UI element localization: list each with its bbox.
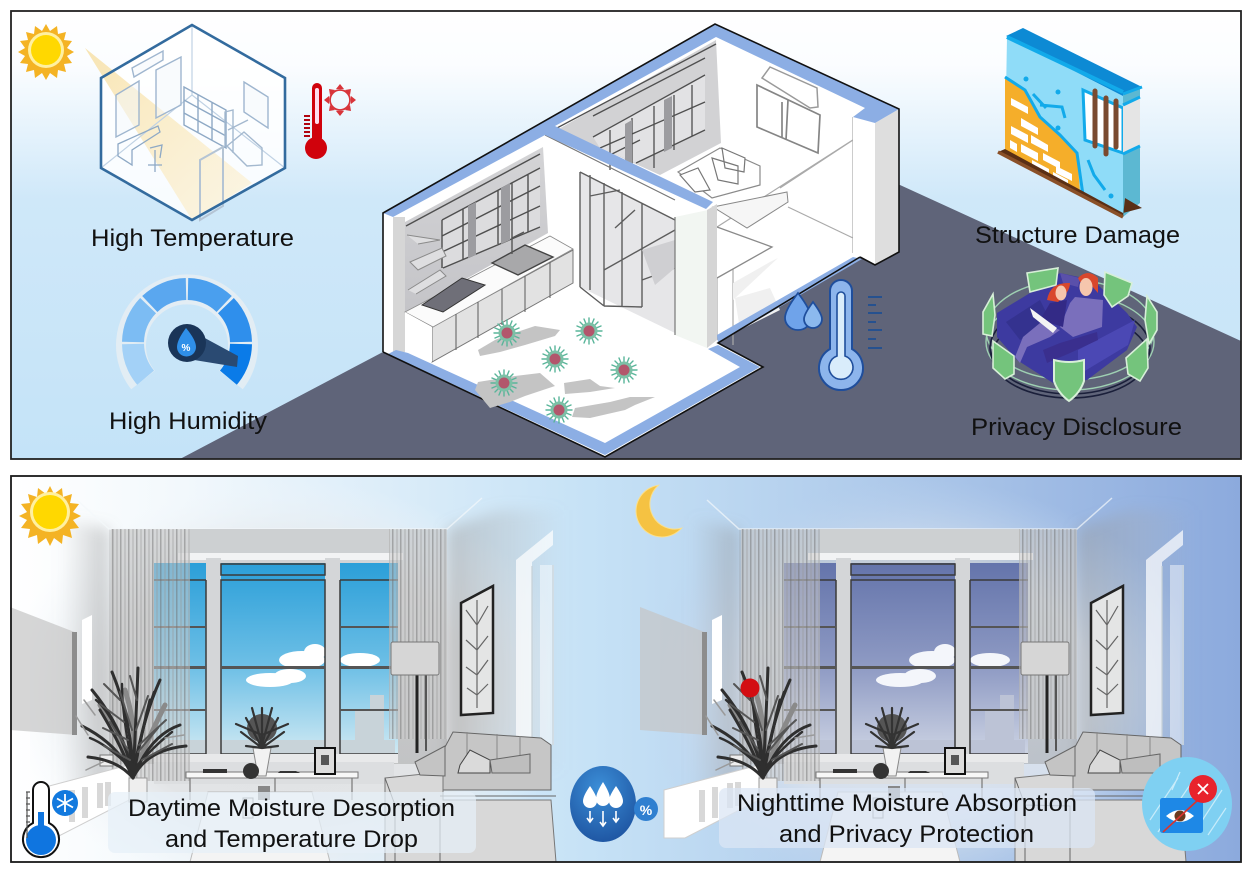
sinks bbox=[422, 278, 485, 312]
mould stains bbox=[475, 326, 655, 418]
kitchen windows bbox=[406, 154, 540, 268]
outlines bbox=[383, 24, 899, 352]
shelves bbox=[407, 235, 446, 294]
sliding door bbox=[580, 172, 675, 333]
icon: sun bbox=[19, 486, 81, 546]
shields front bbox=[1145, 296, 1157, 344]
icon: water drops bbox=[785, 293, 822, 330]
sofa bbox=[997, 273, 1137, 383]
panel: problems of indoor environment bbox=[11, 11, 1241, 459]
dark floor bbox=[180, 185, 1241, 459]
AC and window bbox=[762, 67, 818, 108]
label: nighttime: and Privacy Protection bbox=[779, 821, 1034, 848]
icon: humidity gauge: % bbox=[182, 343, 191, 354]
heading: Structure Damage: Structure Damage bbox=[975, 222, 1180, 249]
counter bbox=[432, 250, 573, 362]
long diagonal lines bbox=[717, 117, 873, 345]
illustration: isometric apartment bbox=[383, 24, 899, 457]
couple bbox=[1060, 273, 1080, 287]
right column bbox=[853, 117, 875, 265]
icon: blue thermometer bbox=[819, 280, 882, 390]
icon: humidity gauge bbox=[131, 289, 243, 380]
icon: moisture droplets bbox=[570, 766, 658, 842]
table and shadows bbox=[717, 227, 772, 278]
label: nighttime bbox=[719, 788, 1095, 848]
wall tops blue bbox=[383, 24, 899, 217]
heading: High Humidity: High Humidity bbox=[109, 408, 267, 435]
heading: Privacy Disclosure: Privacy Disclosure bbox=[971, 414, 1182, 441]
central column bbox=[675, 210, 708, 348]
label: nighttime: Nighttime Moisture Absorption bbox=[737, 790, 1077, 817]
bed bbox=[713, 192, 788, 228]
icon: moisture droplets: % bbox=[640, 802, 653, 818]
icon: privacy couple on sofa with shields bbox=[983, 268, 1157, 401]
label: daytime bbox=[108, 792, 476, 853]
icon: red thermometer with sun bbox=[304, 83, 356, 159]
label: daytime: and Temperature Drop bbox=[165, 826, 418, 853]
icon: thermometer with snowflake bbox=[23, 782, 78, 857]
back room wall and windows bbox=[557, 40, 721, 175]
icon: sun bbox=[18, 24, 74, 80]
icon: blocked eye privacy bbox=[1142, 757, 1232, 851]
scene: daytime living room bbox=[10, 480, 565, 862]
label: daytime: Daytime Moisture Desorption bbox=[128, 795, 455, 822]
icon: crescent moon bbox=[636, 485, 682, 537]
scene: nighttime living room bbox=[640, 480, 1195, 862]
back wall kitchen bbox=[405, 147, 548, 313]
icon: hexagon room with sunlight bbox=[85, 25, 285, 220]
heading: High Temperature: High Temperature bbox=[91, 225, 294, 252]
shields back bbox=[1027, 268, 1058, 292]
viruses bbox=[491, 318, 637, 423]
icon: structure damage wall bbox=[998, 28, 1142, 217]
panel: smart window day and night bbox=[10, 476, 1241, 862]
